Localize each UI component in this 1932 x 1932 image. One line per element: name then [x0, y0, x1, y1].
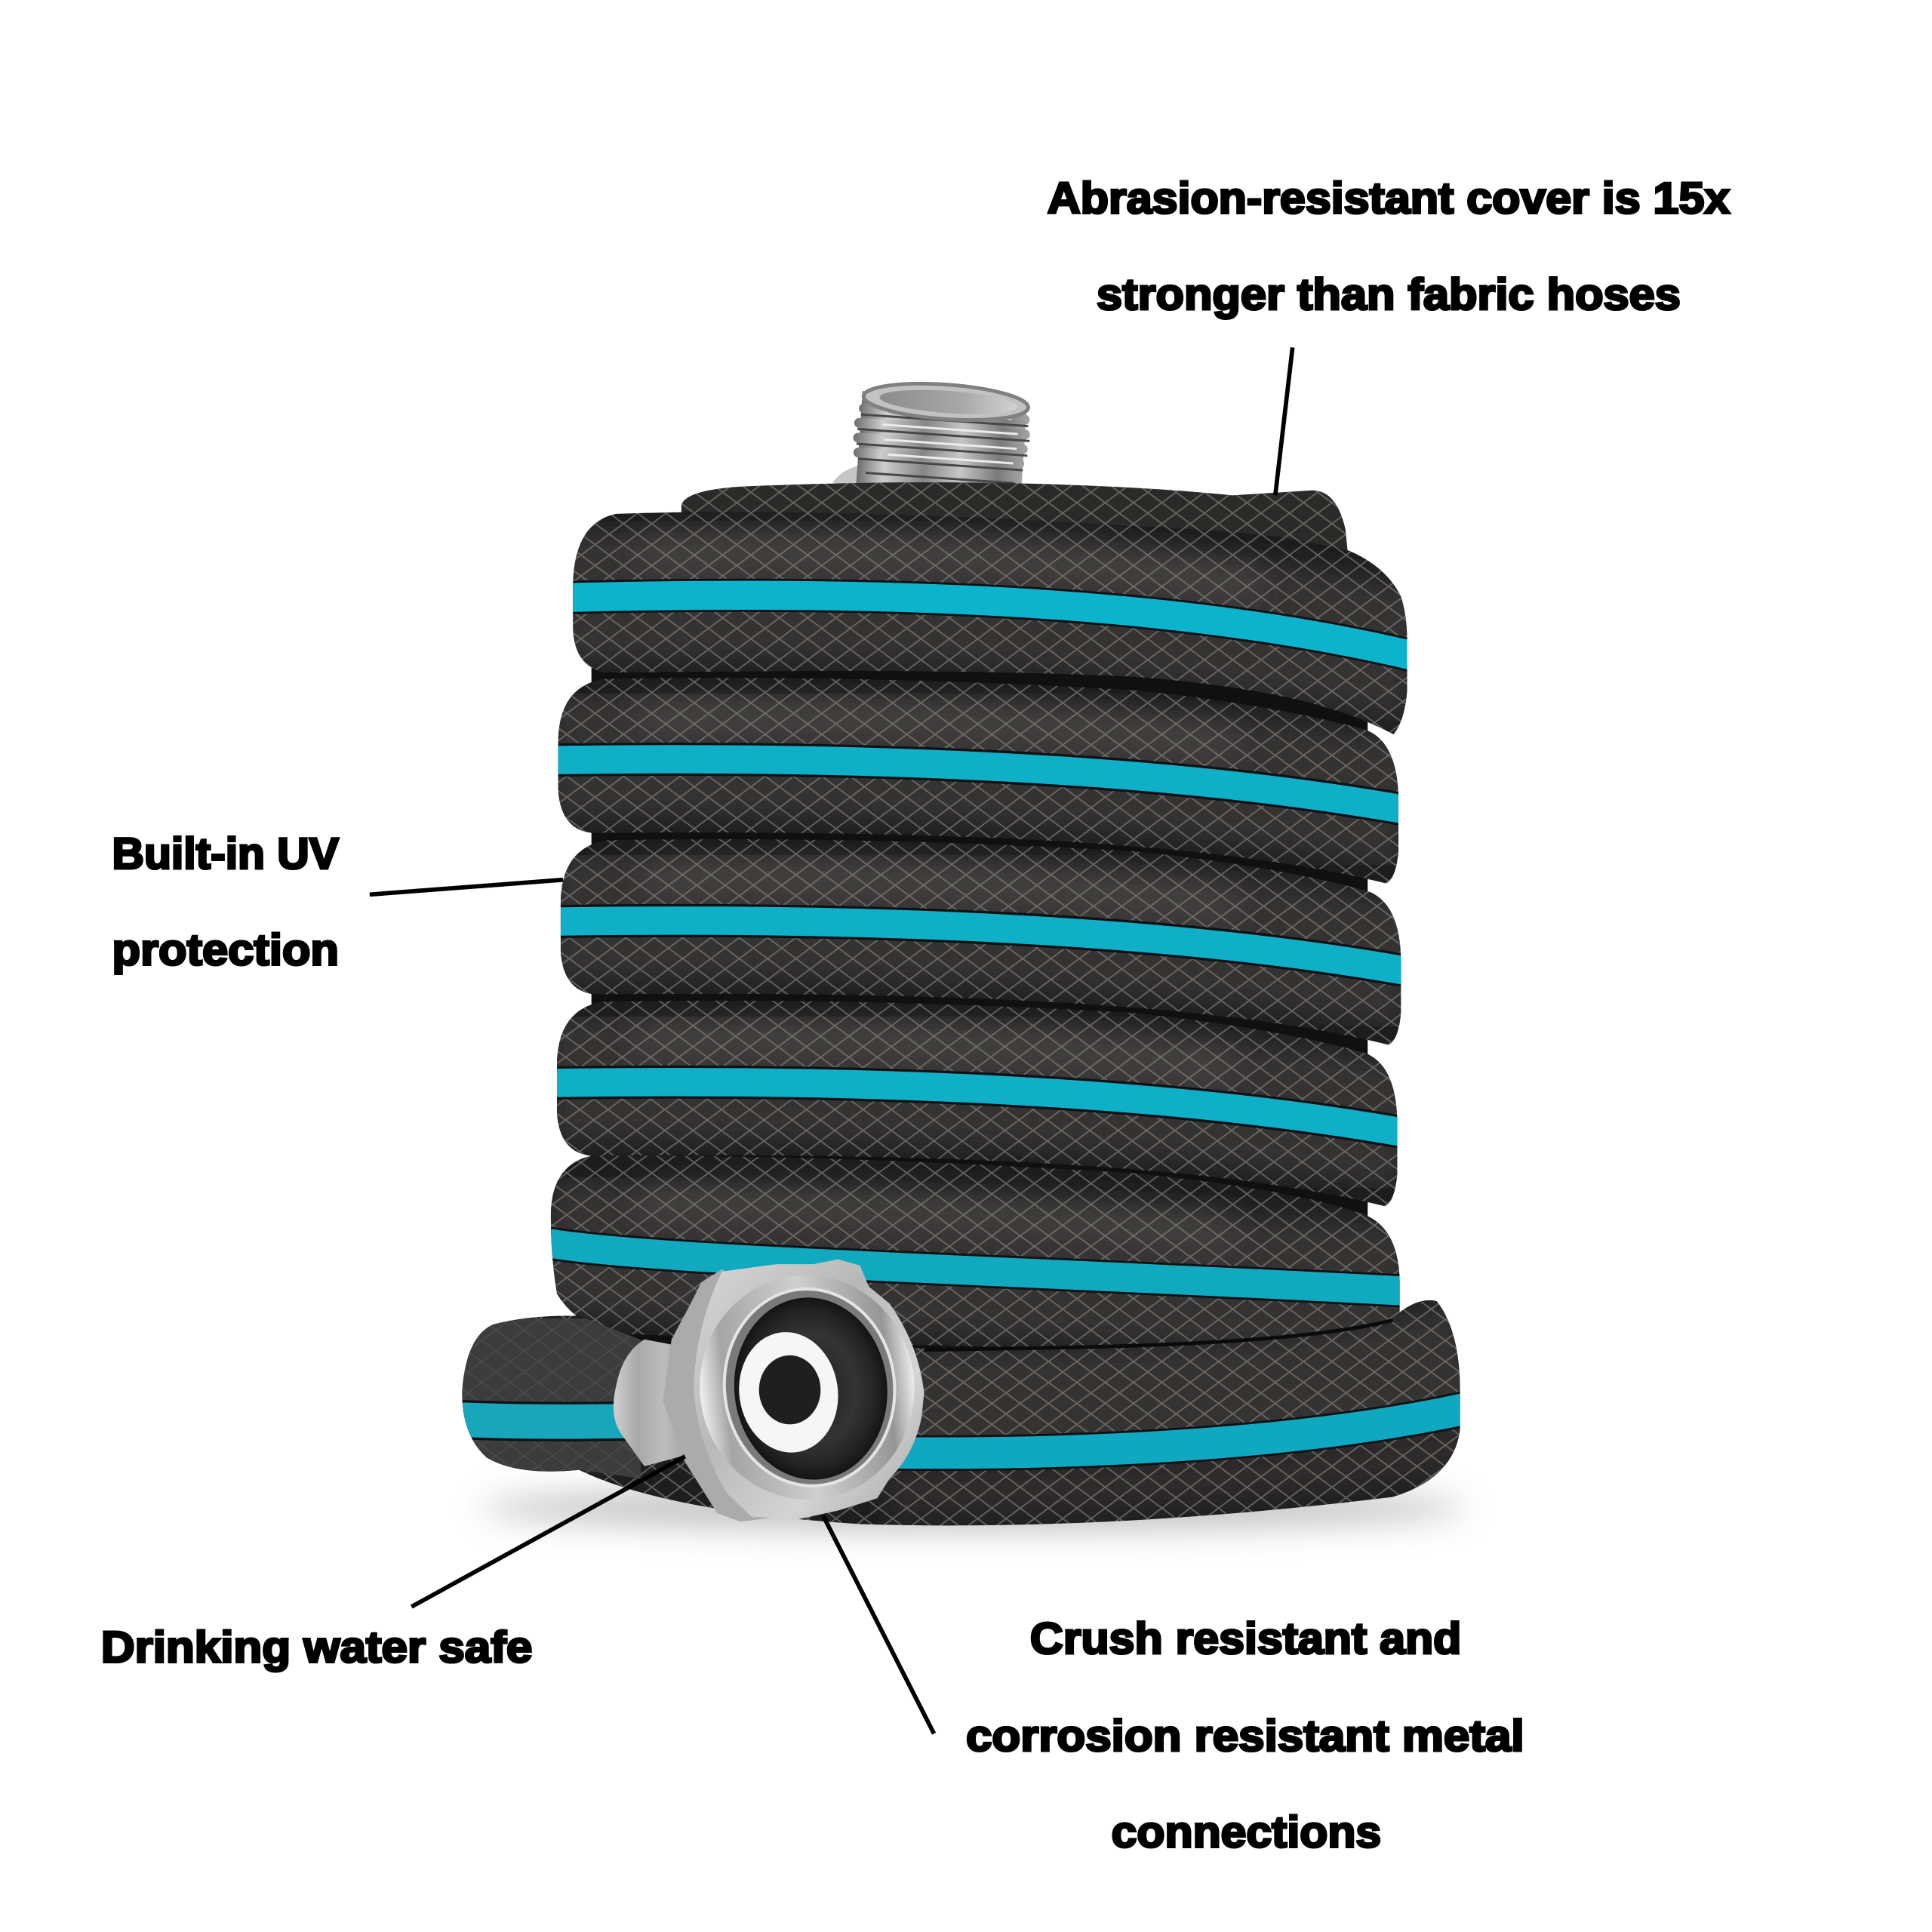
rubber washer: [725, 1290, 897, 1487]
callout: crush and corrosion resistant: [966, 1614, 1524, 1857]
nut body: [694, 1260, 924, 1519]
coil 2: [542, 666, 1417, 900]
callout: abrasion-resistant cover: Abrasion-resistant cover is 15x: [1048, 174, 1730, 223]
coil 3: [545, 828, 1420, 1062]
collar: [614, 1340, 696, 1466]
floor shadow: [481, 1486, 1466, 1531]
hose coils: [450, 499, 1472, 1540]
leader lines: [370, 347, 1293, 1734]
nut flank: [663, 1269, 814, 1521]
leader: UV: [370, 880, 563, 894]
coil 5: [551, 1155, 1400, 1346]
leader: abrasion: [1275, 347, 1293, 495]
callout: UV protection: Built-in UV: [112, 829, 339, 878]
bore: [759, 1355, 820, 1424]
coil 4: [541, 989, 1416, 1223]
white insert: [731, 1326, 846, 1459]
backing behind coils: [592, 592, 1367, 1349]
callout: abrasion-resistant cover: stronger than fabric hoses: [1097, 270, 1681, 319]
male threaded fitting: [833, 378, 1033, 497]
rim: [689, 1265, 925, 1510]
callout: UV protection: [112, 829, 339, 974]
callout: drinking water safe: Drinking water safe: [101, 1623, 532, 1672]
callout: abrasion-resistant cover: [1048, 174, 1730, 319]
callout: UV protection: protection: [112, 925, 339, 974]
callout: crush and corrosion resistant: Crush resistant and: [1030, 1614, 1461, 1663]
leader: drinking water: [411, 1457, 685, 1607]
female metal connector: [614, 1260, 925, 1521]
callout: crush and corrosion resistant: connections: [1112, 1807, 1381, 1857]
bottom coil: [462, 1300, 1460, 1526]
top hose end: [681, 482, 1349, 567]
coil 1: [573, 512, 1407, 734]
callout: crush and corrosion resistant: corrosion resistant metal: [966, 1712, 1524, 1761]
leader: metal connections: [823, 1515, 934, 1734]
infographic: hose with feature callouts: [103, 180, 1732, 1849]
